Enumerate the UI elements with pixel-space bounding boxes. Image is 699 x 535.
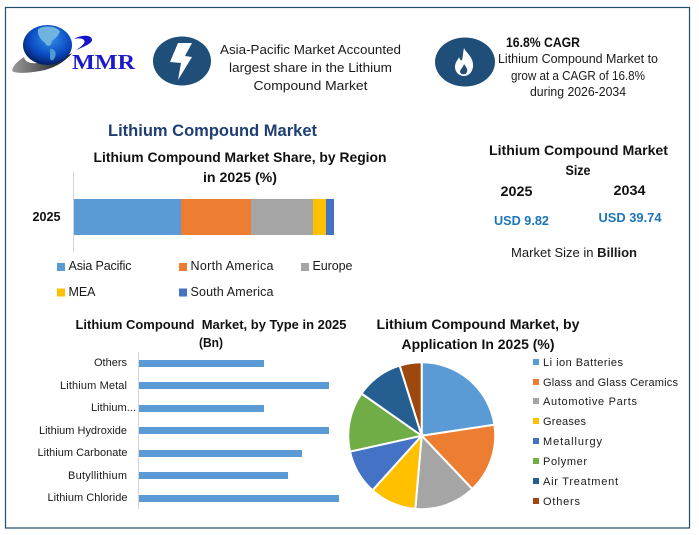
stacked bar chart: 2025 [32, 210, 61, 224]
callout: Asia-Pacific share [220, 42, 401, 93]
legend: applications: Air Treatment [543, 476, 618, 488]
legend: regions: South America [190, 285, 274, 299]
legend: regions: North America [190, 259, 274, 273]
callout: CAGR [498, 34, 658, 99]
legend: applications: Glass and Glass Ceramics [543, 377, 678, 389]
legend: applications: Others [543, 496, 580, 508]
heading: region share: Lithium Compound Market Share, by Region [94, 149, 386, 165]
panel: market size [489, 142, 668, 260]
callout: CAGR: 16.8% CAGR [506, 34, 580, 50]
heading: by application: Lithium Compound Market, by [376, 316, 580, 332]
stacked bar chart [32, 172, 334, 252]
legend: applications: Li ion Batteries [543, 357, 624, 369]
icon: lightning bolt [153, 36, 211, 86]
bar chart: by type [38, 352, 339, 509]
legend: regions: Europe [312, 259, 353, 273]
callout: Asia-Pacific share: largest share in the Lithium [229, 60, 392, 75]
callout: CAGR: grow at a CAGR of 16.8% [511, 69, 645, 83]
heading: by type: Lithium Compound Market, by Type in 2025 [76, 318, 347, 332]
legend: applications: Polymer [543, 456, 587, 468]
icon: flame [435, 38, 495, 86]
bar chart: by type: Lithium... [91, 402, 136, 414]
heading: by application [376, 316, 580, 352]
bar chart: by type: Lithium Carbonate [38, 447, 128, 459]
legend: regions [57, 259, 353, 299]
icon: MMR logo [12, 25, 136, 74]
panel: market size: 2034 [614, 182, 646, 198]
heading: by application: Application In 2025 (%) [402, 336, 554, 352]
callout: CAGR: during 2026-2034 [530, 85, 626, 99]
legend: applications: Automotive Parts [543, 396, 638, 408]
bar chart: by type: Lithium Chloride [48, 492, 128, 504]
panel: market size: USD 9.82 [494, 213, 549, 228]
bar chart: by type: Lithium Metal [60, 380, 127, 392]
callout: Asia-Pacific share: Asia-Pacific Market Accounted [220, 42, 401, 57]
heading: region share: in 2025 (%) [203, 169, 277, 185]
legend: applications [533, 357, 678, 508]
bar chart: by type: Others [94, 357, 128, 369]
legend: applications: Metallurgy [543, 436, 602, 448]
callout: Asia-Pacific share: Compound Market [254, 78, 368, 93]
logo wordmark: MMR [72, 50, 136, 74]
title: Lithium Compound Market [108, 121, 317, 140]
panel: market size: USD 39.74 [598, 210, 662, 225]
legend: regions: MEA [68, 285, 96, 299]
panel: market size: Market Size in Billion [511, 245, 637, 260]
bar chart: by type: Lithium Hydroxide [39, 425, 127, 437]
bar chart: by type: Butyllithium [68, 470, 127, 482]
legend: applications: Greases [543, 416, 586, 428]
pie chart: by application [348, 362, 495, 509]
panel: market size: Size [566, 162, 591, 178]
callout: CAGR: Lithium Compound Market to [498, 52, 658, 66]
legend: regions: Asia Pacific [68, 259, 132, 273]
panel: market size: 2025 [500, 183, 533, 199]
heading: by type: (Bn) [199, 336, 223, 350]
panel: market size: Lithium Compound Market [489, 142, 668, 158]
heading: by type [76, 318, 347, 350]
heading: region share [94, 149, 386, 185]
